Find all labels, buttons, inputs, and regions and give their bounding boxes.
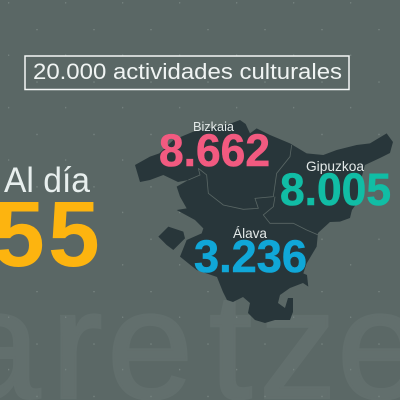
label: Bizkaia: Bizkaia [193, 119, 235, 134]
label: Gipuzkoa: Gipuzkoa [306, 158, 364, 174]
number: Bizkaia: 8.662 [159, 125, 270, 176]
title box: 20.000 actividades culturales [33, 59, 342, 84]
heading: Al día: Al día [4, 161, 91, 200]
label: Álava: Álava [233, 225, 267, 241]
watermark: aretze [0, 300, 400, 400]
number: Álava: 3.236 [194, 231, 307, 282]
map: Basque Country [135, 120, 393, 323]
number: Gipuzkoa: 8.005 [280, 164, 391, 215]
title box [25, 56, 349, 90]
